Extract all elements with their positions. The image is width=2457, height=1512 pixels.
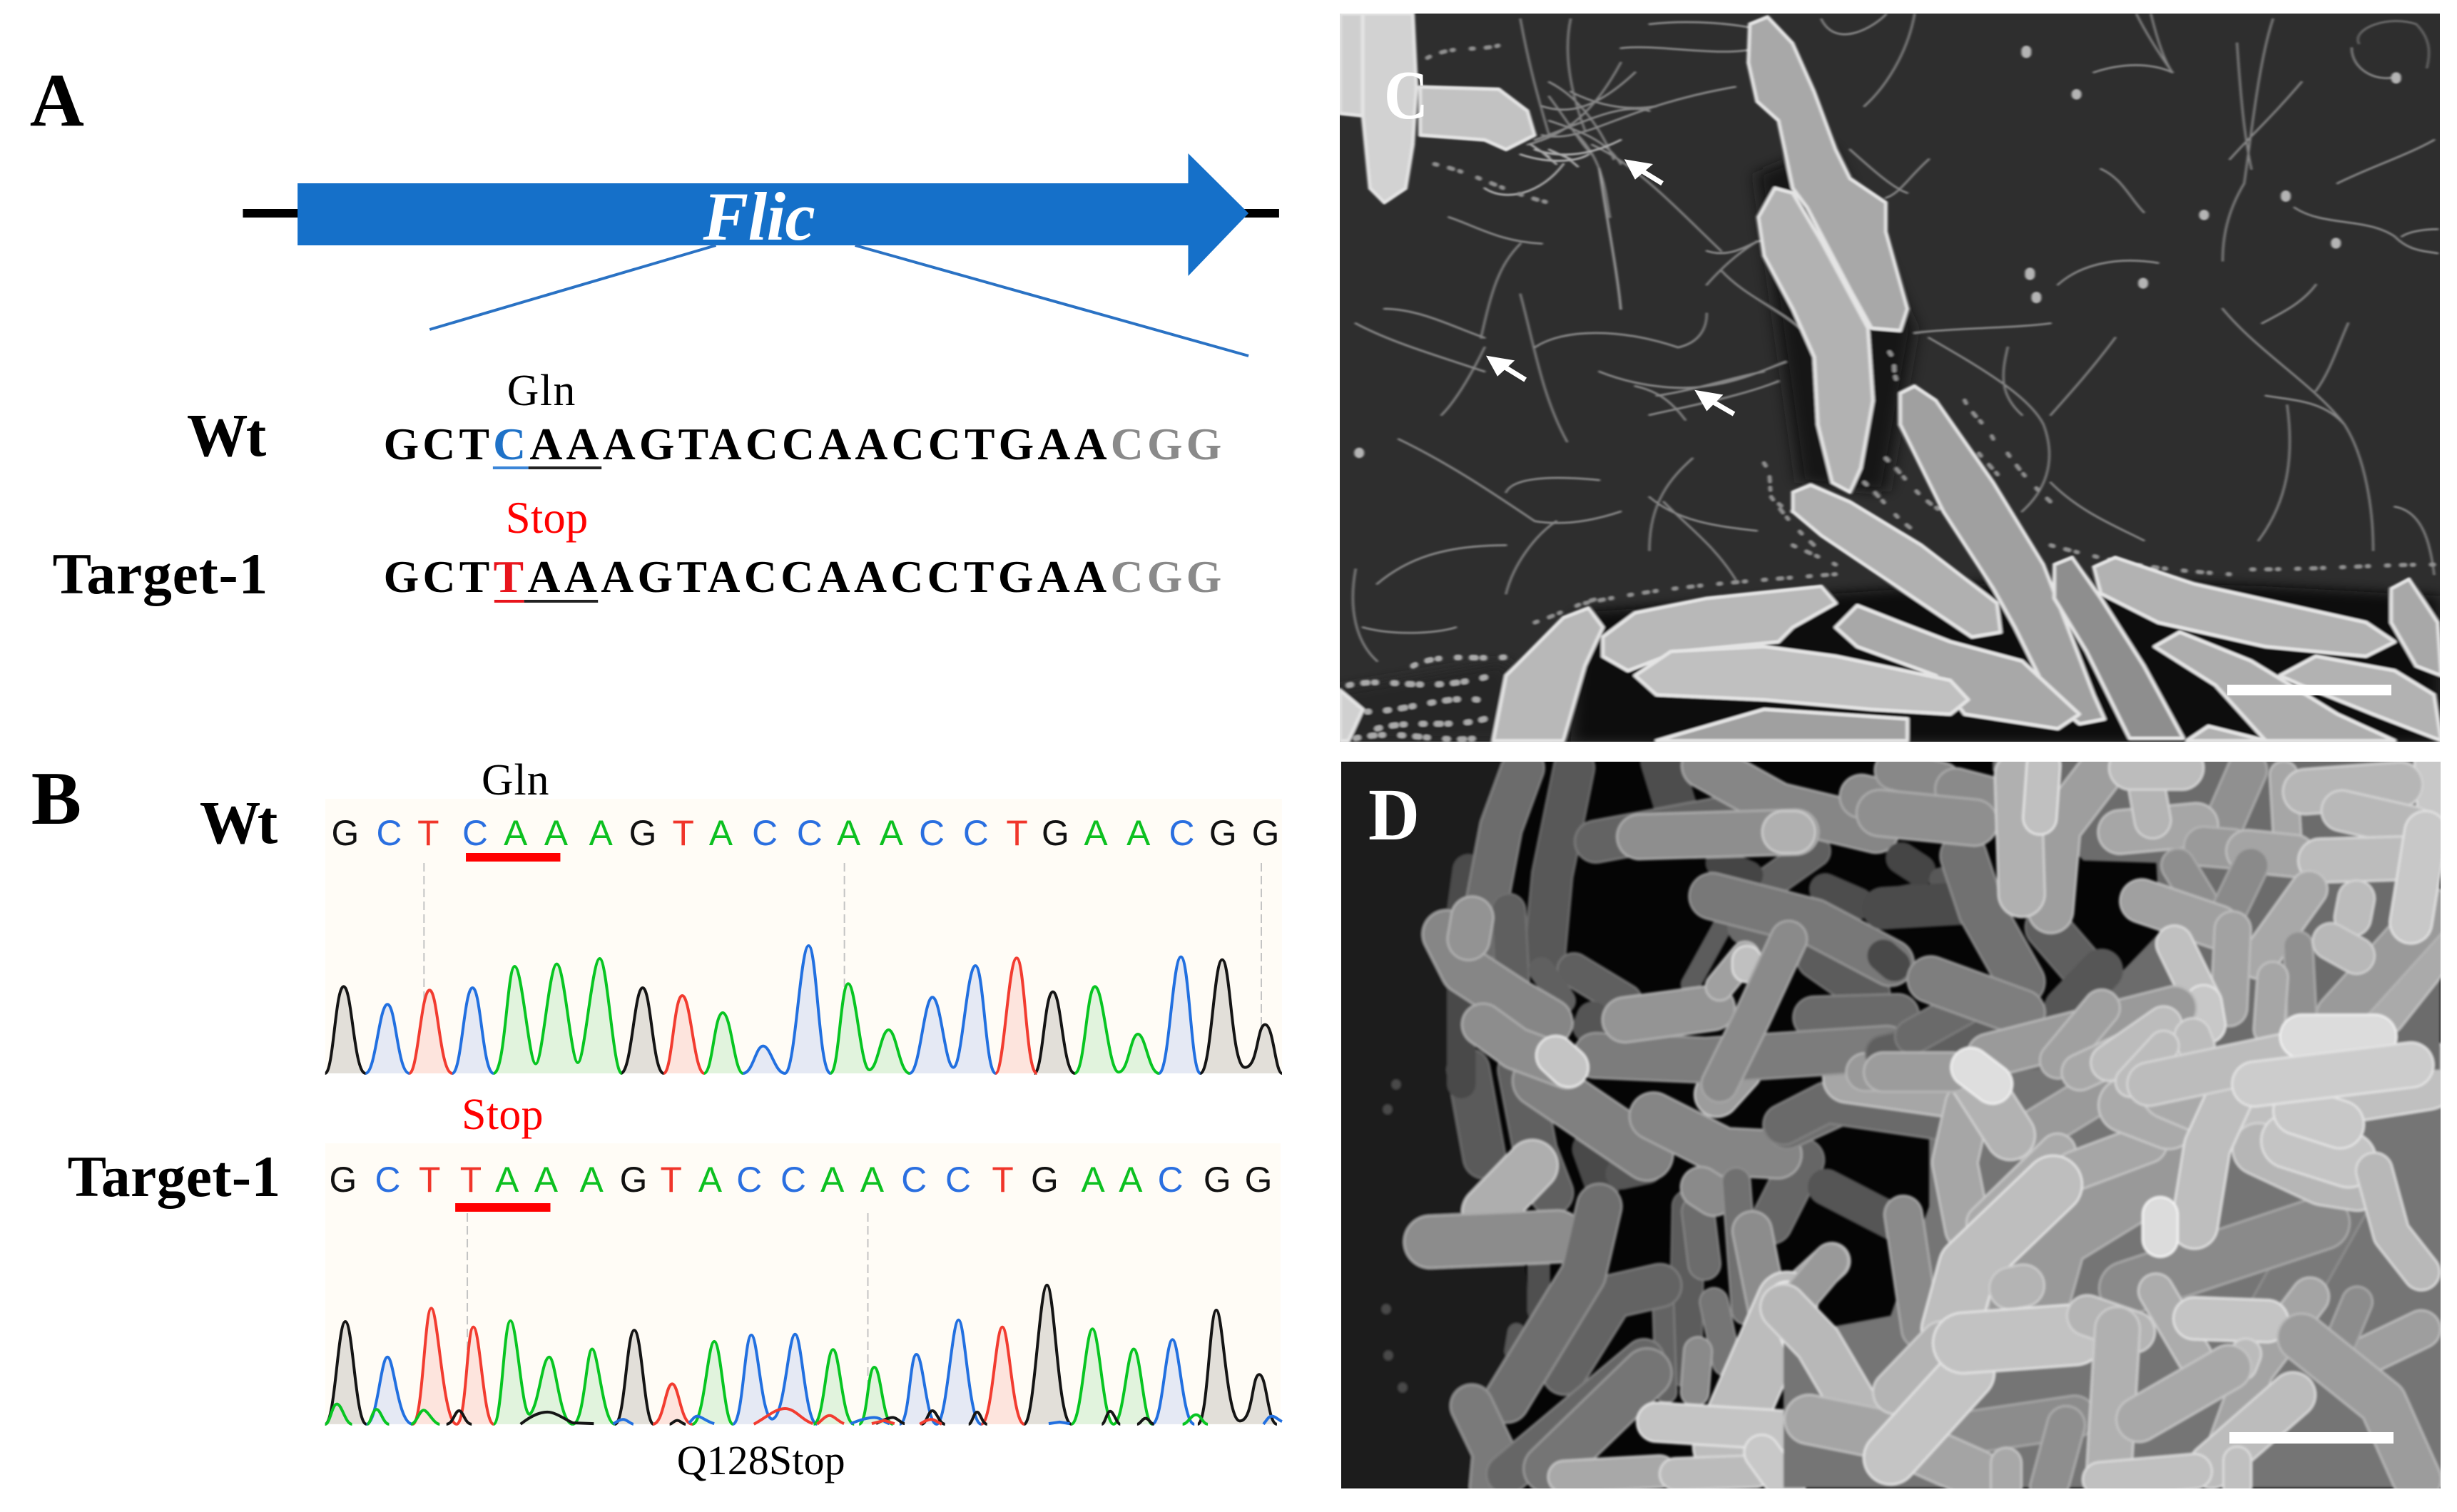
codon bar Wt <box>466 853 560 862</box>
codon underline Wt <box>493 466 601 469</box>
lower-left rods <box>1430 1070 1841 1488</box>
caption: Q128Stop: Q128Stop <box>677 1437 845 1483</box>
panel label D: D <box>1368 774 1420 856</box>
row label: Wt (B): Wt <box>200 789 278 857</box>
panel B: sequencing chromatograms <box>31 756 1282 1483</box>
codon bar Target-1 <box>455 1203 551 1212</box>
bacteria rods C <box>1340 14 2441 741</box>
shadows under bacteria <box>1334 145 2441 743</box>
upper-right rods <box>1880 756 2440 1084</box>
row label: Wt (A): Wt <box>187 402 267 469</box>
small spores <box>1359 51 2396 453</box>
label: Gln (A): Gln <box>507 367 575 415</box>
panel D: SEM image of bacteria <box>1341 756 2443 1488</box>
upper-left rods <box>1447 761 1912 1084</box>
debris particles <box>1341 44 2438 740</box>
spores on substrate <box>1386 1084 1403 1388</box>
panel label C: C <box>1384 57 1428 134</box>
label: Gln (B): Gln <box>482 756 549 804</box>
codon underline Target-1 <box>494 600 598 603</box>
chromatogram Target-1 <box>325 1143 1282 1424</box>
gene arrow: Flic <box>243 153 1279 276</box>
zoom lines from gene to sequence <box>429 245 1248 356</box>
panel label A: A <box>30 58 84 142</box>
base calls Target-1: G C TT AAA G T A CC AA CC T G AA C GG <box>329 1160 1272 1200</box>
substrate background <box>1341 762 1530 1488</box>
trace peaks Target-1 <box>325 1285 1282 1424</box>
panel A: gene map and sequences <box>30 58 1279 606</box>
row label: Target-1 (A): Target-1 <box>53 541 268 606</box>
flagella arrows <box>1486 159 1734 414</box>
label: Stop (A): Stop <box>506 493 588 543</box>
lower-right rods <box>1784 1070 2443 1488</box>
mutant sequence: GCTTAAAGTACCAACCTGAACGG <box>384 551 1221 602</box>
scale bar C <box>2227 685 2391 695</box>
panel C: SEM image with flagella <box>1334 14 2441 743</box>
gene arrow: Flic: Flic <box>703 179 815 255</box>
row label: Target-1 (B): Target-1 <box>68 1144 280 1209</box>
scale bar D <box>2229 1432 2394 1444</box>
wild-type sequence: GCTCAAAGTACCAACCTGAACGG <box>384 419 1221 469</box>
label: Stop (B): Stop <box>462 1090 544 1139</box>
trace peaks Wt <box>325 946 1282 1073</box>
chromatogram Wt <box>325 799 1282 1073</box>
base calls Wt: G C T C AAA G T A CC AA CC T G AA C GG <box>331 813 1279 853</box>
panel label B: B <box>31 757 81 840</box>
flagella filaments <box>1353 14 2438 661</box>
